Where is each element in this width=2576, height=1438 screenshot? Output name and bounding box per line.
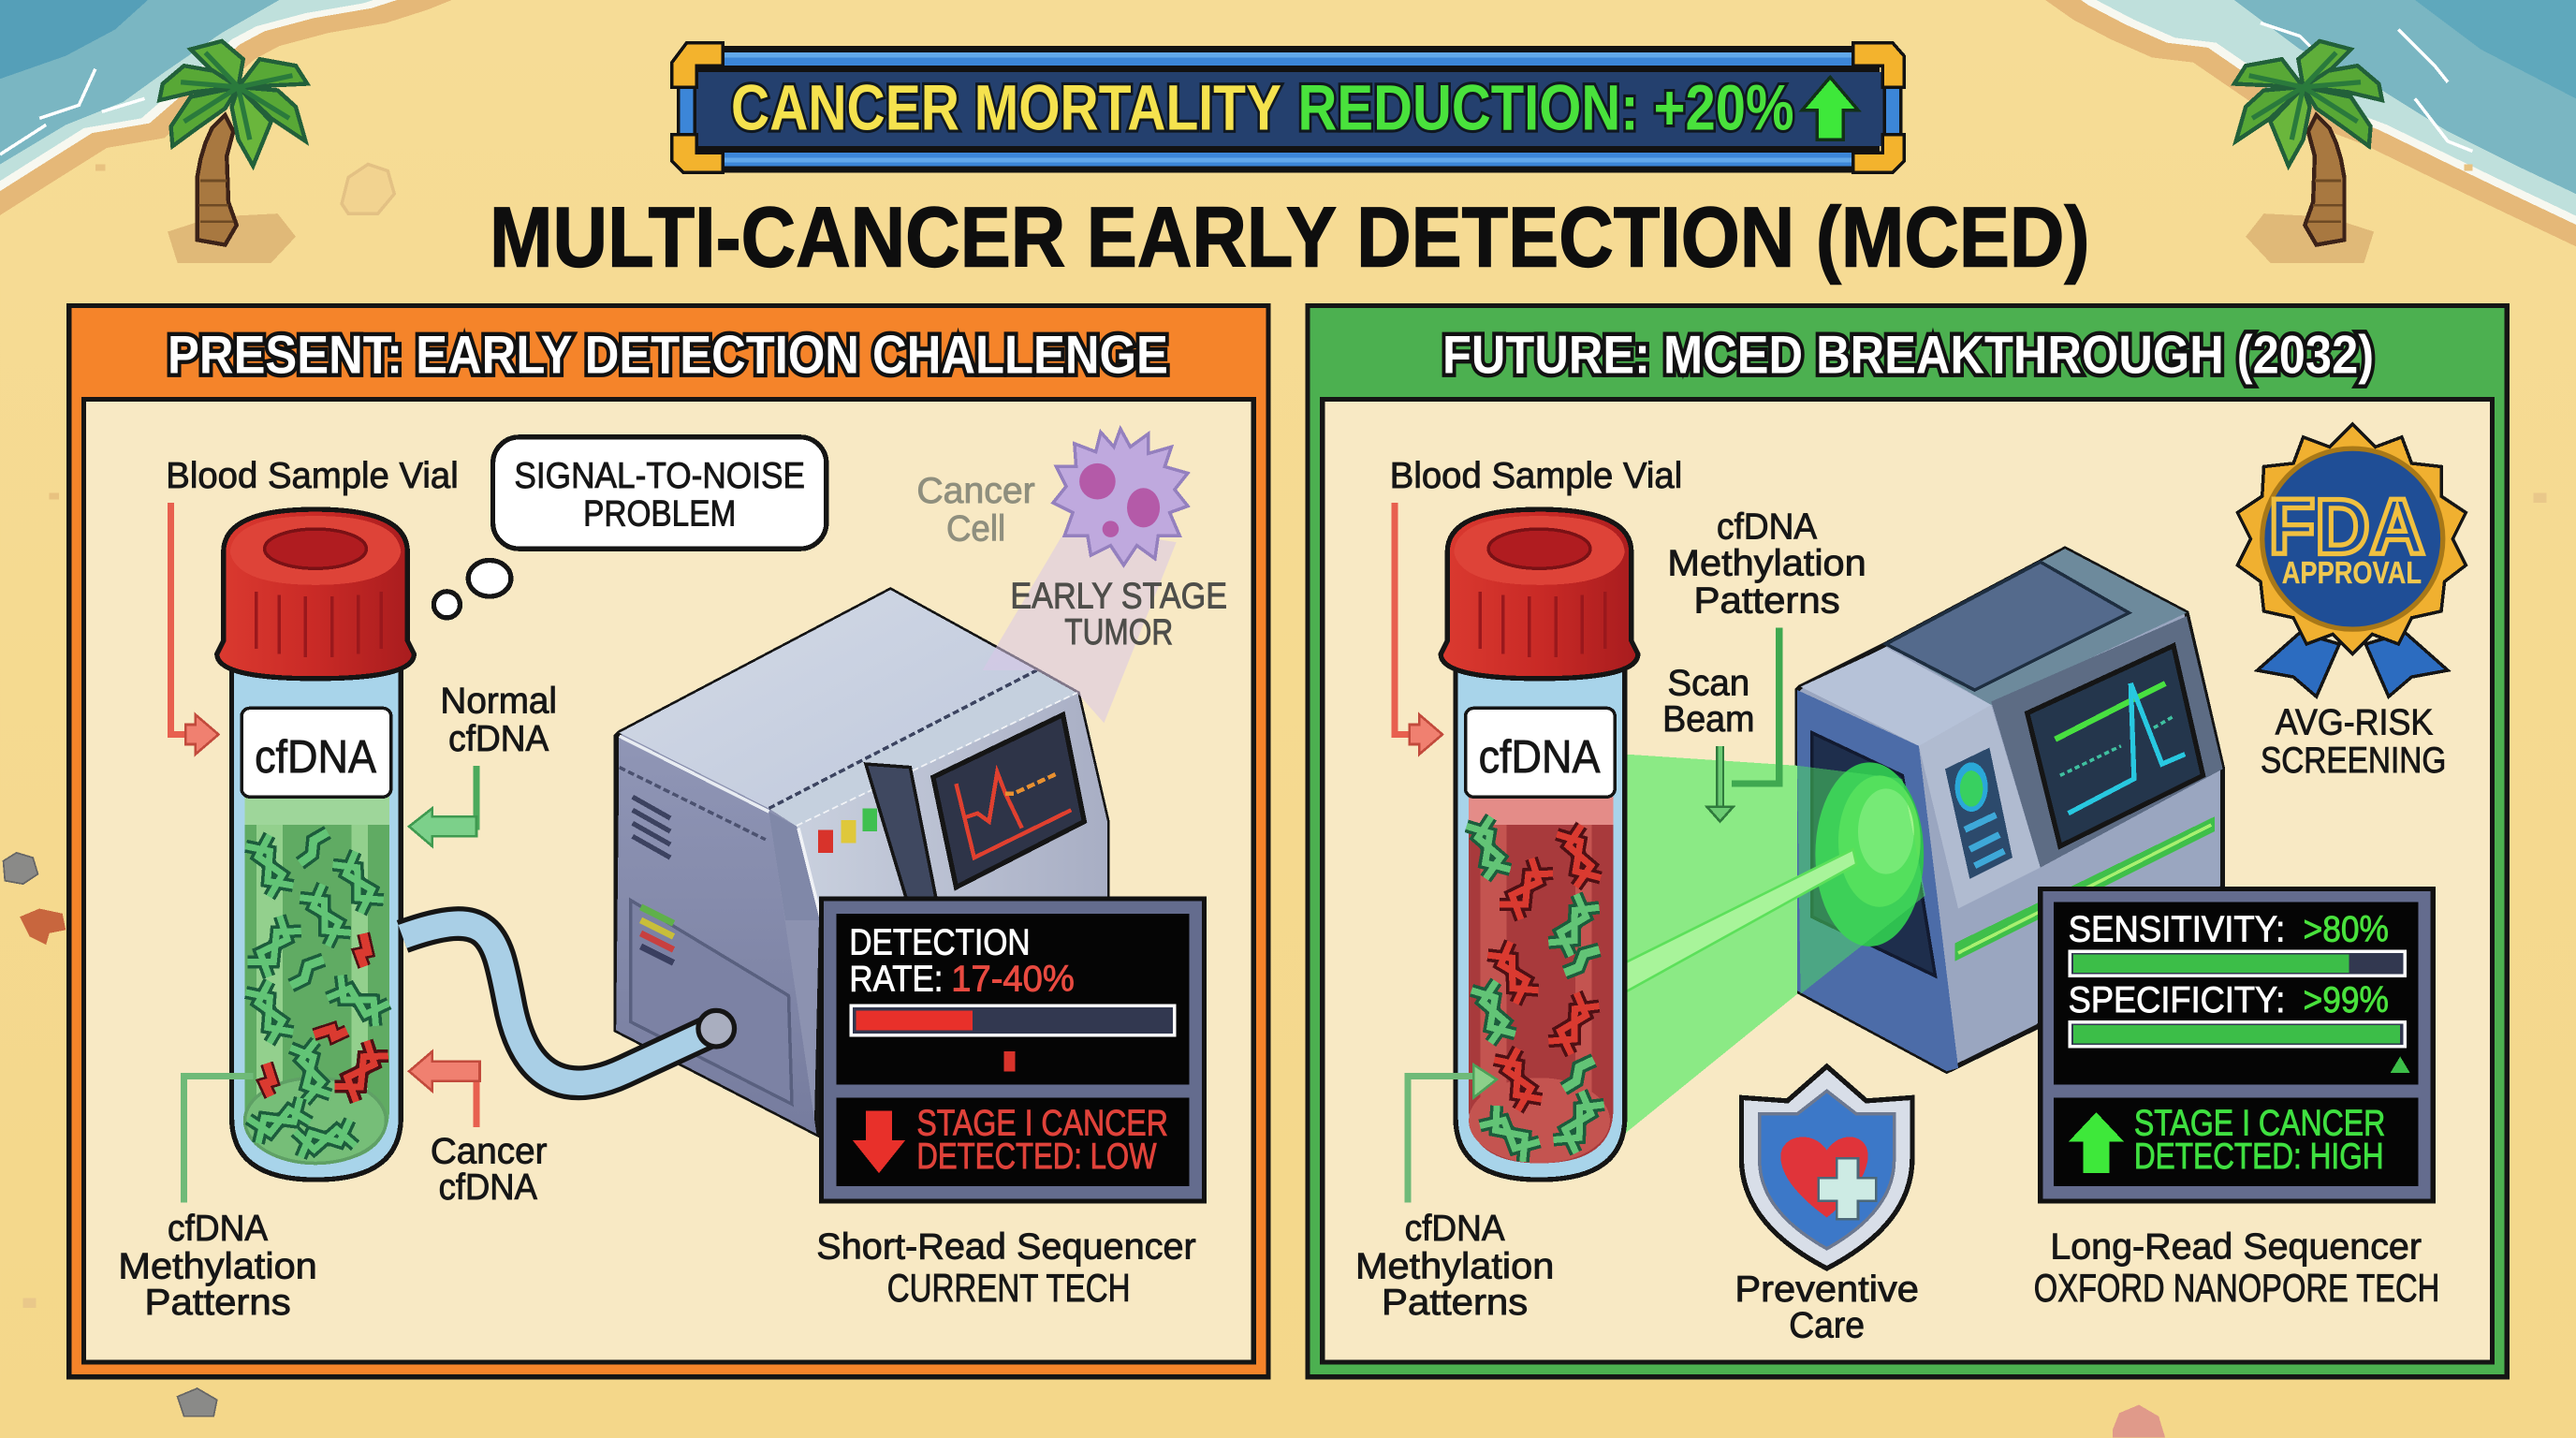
banner frame xyxy=(672,43,1904,172)
vial label xyxy=(242,708,391,797)
progress bar xyxy=(851,1005,1175,1071)
label: methylation bottom: Patterns xyxy=(1382,1283,1528,1323)
hud: detection rate: 17-40% xyxy=(951,959,1075,999)
front strip xyxy=(866,764,936,901)
hud: sensitivity specificity: >80% xyxy=(2304,910,2389,950)
banner: cancer mortality reduction xyxy=(672,43,1904,172)
label: early stage tumor xyxy=(1010,576,1227,653)
vial label xyxy=(1466,708,1615,797)
icon: fda badge: APPROVAL xyxy=(2282,556,2422,591)
label: methylation: Patterns xyxy=(145,1283,291,1323)
panel: present xyxy=(69,305,1268,1377)
tube xyxy=(402,924,735,1083)
hud: detection rate: DETECTION xyxy=(849,923,1030,963)
vial glass xyxy=(1456,649,1625,1180)
panel frame future xyxy=(1308,305,2507,1377)
thought bubble xyxy=(433,437,827,618)
label: cancer cell: Cancer xyxy=(916,471,1035,511)
arrow: methylation bottom xyxy=(1408,1064,1497,1203)
colored vents xyxy=(641,907,674,923)
label: cancer cfdna: cfDNA xyxy=(439,1167,537,1208)
label: preventive care: Care xyxy=(1789,1306,1865,1346)
label: avg-risk screening: SCREENING xyxy=(2261,741,2446,781)
icon: fda badge: FDA xyxy=(2269,482,2424,570)
icon: shield xyxy=(1741,1066,1912,1269)
arrow: cancer cfdna xyxy=(409,1051,480,1127)
green strip xyxy=(1955,816,2215,961)
icon: cancer cell xyxy=(1053,429,1188,565)
label: long-read sequencer: OXFORD NANOPORE TECH xyxy=(2034,1266,2439,1310)
icon: palm tree left xyxy=(159,41,307,263)
vial: cancer future: cfDNA xyxy=(1479,732,1601,783)
label: blood sample vial: Blood Sample Vial xyxy=(166,456,459,496)
dna fragments xyxy=(1467,817,1604,1162)
hud: sensitivity specificity: DETECTED: HIGH xyxy=(2134,1137,2384,1177)
label: methylation bottom: Methylation xyxy=(1355,1246,1554,1286)
label: early stage tumor: EARLY STAGE xyxy=(1010,576,1227,616)
screen xyxy=(933,714,1084,888)
icon: up arrow xyxy=(2069,1112,2124,1173)
label: scan beam: Scan xyxy=(1667,663,1749,703)
arrow: vial xyxy=(171,503,218,755)
banner text green: REDUCTION: +20% xyxy=(1298,72,1794,144)
hud: detection rate xyxy=(822,899,1204,1201)
label: blood sample vial: Blood Sample Vial xyxy=(1390,456,1682,496)
vial: cancer future xyxy=(1441,509,1638,1180)
label: short-read sequencer: CURRENT TECH xyxy=(887,1266,1131,1310)
title: MULTI-CANCER EARLY DETECTION (MCED) xyxy=(490,189,2089,285)
vents xyxy=(633,797,670,858)
label: cancer cell: Cell xyxy=(946,508,1005,549)
label: methylation bottom: cfDNA xyxy=(1405,1209,1505,1249)
icon: fda badge xyxy=(2237,424,2466,697)
vial: cancer present xyxy=(217,509,414,1180)
vial glass xyxy=(232,649,401,1180)
sensitivity bar xyxy=(2070,951,2405,976)
icon: palm tree right xyxy=(2234,41,2382,263)
thought bubble: PROBLEM xyxy=(583,494,736,535)
label: preventive care: Preventive xyxy=(1734,1269,1919,1310)
panel frame present xyxy=(69,305,1268,1377)
heading present: PRESENT: EARLY DETECTION CHALLENGE xyxy=(168,325,1168,385)
green scan beam xyxy=(1625,755,1925,1134)
label: methylation: Methylation xyxy=(118,1246,317,1286)
specificity bar xyxy=(2070,1022,2410,1073)
hud: detection rate: STAGE I CANCER xyxy=(916,1104,1168,1144)
label: normal cfdna xyxy=(440,682,557,759)
label: long-read sequencer: Long-Read Sequencer xyxy=(2050,1226,2422,1267)
aperture xyxy=(1812,733,1935,976)
label: methylation top: Methylation xyxy=(1667,543,1866,583)
panel: future xyxy=(1308,305,2507,1377)
hud: sensitivity specificity: STAGE I CANCER xyxy=(2134,1104,2385,1144)
arrow: scan beam xyxy=(1707,746,1734,822)
thought bubble: SIGNAL-TO-NOISE xyxy=(514,456,805,496)
dna fragments xyxy=(246,832,389,1157)
arrow: methylation top xyxy=(1732,627,1779,784)
label: scan beam: Beam xyxy=(1662,699,1754,740)
ocean top right xyxy=(2045,0,2576,246)
label: short-read sequencer xyxy=(816,1226,1196,1310)
label: cancer cfdna xyxy=(431,1132,548,1208)
label: normal cfdna: Normal xyxy=(440,682,557,722)
label: early stage tumor: TUMOR xyxy=(1064,612,1173,653)
label: long-read sequencer xyxy=(2034,1226,2439,1310)
label: cancer cfdna: Cancer xyxy=(431,1132,548,1172)
hud: sensitivity specificity: SPECIFICITY: xyxy=(2069,980,2285,1020)
vial liquid xyxy=(1469,797,1613,1164)
vial cap xyxy=(1441,509,1638,679)
ocean top left xyxy=(0,0,452,215)
icon: up arrow xyxy=(1802,77,1858,139)
banner text yellow: CANCER MORTALITY xyxy=(731,72,1281,144)
label: methylation top: cfDNA xyxy=(1717,507,1817,548)
label: cancer cell xyxy=(916,471,1035,549)
screen xyxy=(2027,646,2203,846)
label: preventive care xyxy=(1734,1269,1919,1346)
label: avg-risk screening xyxy=(2261,702,2446,781)
hud: sensitivity specificity xyxy=(2041,888,2433,1201)
scan glow to tumor xyxy=(983,526,1177,723)
label: scan beam xyxy=(1662,663,1754,740)
label: methylation bottom xyxy=(1355,1209,1554,1323)
hud: detection rate: RATE: xyxy=(849,959,943,999)
side panel xyxy=(1945,748,2012,879)
arrow: vial xyxy=(1395,503,1442,755)
vial cap xyxy=(217,509,414,679)
vial: cancer present: cfDNA xyxy=(255,732,376,783)
hud: detection rate: DETECTED: LOW xyxy=(916,1137,1157,1177)
icon: down arrow xyxy=(853,1110,905,1173)
label: methylation xyxy=(118,1209,317,1323)
heading future: FUTURE: MCED BREAKTHROUGH (2032) xyxy=(1442,325,2374,385)
LEDs xyxy=(818,829,833,853)
label: methylation top xyxy=(1667,507,1866,622)
hud: sensitivity specificity: SENSITIVITY: xyxy=(2069,910,2285,950)
vial liquid xyxy=(245,797,389,1164)
label: avg-risk screening: AVG-RISK xyxy=(2276,702,2433,742)
label: normal cfdna: cfDNA xyxy=(448,719,549,759)
machine: short-read sequencer xyxy=(616,590,1107,1134)
machine: long-read sequencer xyxy=(1797,549,2223,1071)
label: short-read sequencer: Short-Read Sequencer xyxy=(816,1226,1196,1267)
hud: sensitivity specificity: >99% xyxy=(2304,980,2389,1020)
label: methylation top: Patterns xyxy=(1693,581,1840,622)
arrow: methylation xyxy=(184,1077,253,1203)
arrow: normal cfdna xyxy=(409,766,476,846)
label: methylation: cfDNA xyxy=(168,1209,268,1249)
